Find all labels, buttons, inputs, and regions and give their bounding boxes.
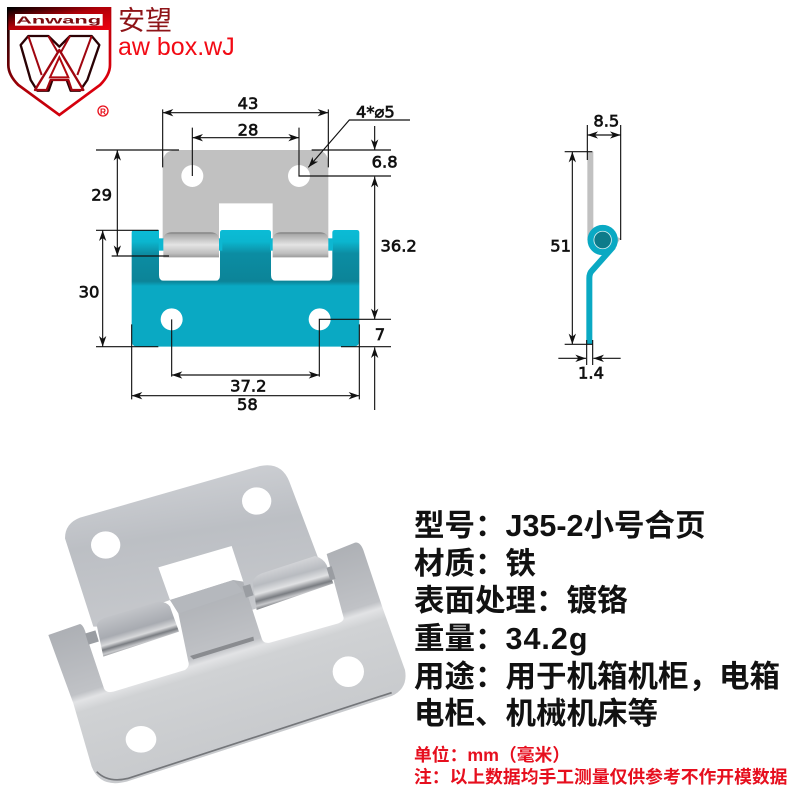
specification text: 重量：34.2g	[414, 622, 588, 656]
specification text: 表面处理：镀铬	[414, 584, 628, 618]
hinge knuckles	[159, 232, 333, 257]
dimension labels: 1.4	[578, 364, 604, 383]
logo: Anwang shield: Anwang	[16, 15, 101, 26]
dimension lines	[558, 125, 621, 365]
teal lower leaf	[132, 230, 359, 347]
specification text: 材质：铁	[414, 547, 536, 581]
dimension labels: 43	[238, 94, 258, 113]
specification text	[414, 509, 780, 731]
lower plate bend highlight	[190, 637, 254, 659]
hinge pins	[85, 566, 335, 645]
mounting holes	[91, 487, 364, 753]
unit and measurement notes: 单位：mm（毫米）	[414, 744, 570, 765]
dimension lines	[96, 109, 410, 410]
right knuckle	[253, 556, 333, 610]
dimension labels: 37.2	[230, 376, 267, 395]
bottom edge highlight	[97, 693, 392, 780]
dimension labels: 51	[550, 237, 571, 256]
side view technical drawing	[550, 112, 621, 383]
front view technical drawing	[79, 94, 417, 414]
brand name: 安望	[118, 6, 172, 36]
teal leaf section	[589, 228, 615, 344]
specification text: 型号：J35-2小号合页	[414, 509, 706, 543]
upper plate	[65, 465, 332, 627]
dimension labels	[550, 112, 619, 383]
brand name: aw box.wJ	[118, 33, 235, 61]
gray leaf section	[587, 152, 621, 247]
dimension labels: 30	[79, 282, 99, 301]
left knuckle	[97, 602, 179, 657]
dimension labels: 6.8	[372, 153, 398, 172]
dimension labels: 7	[375, 325, 385, 344]
centre knuckle	[170, 580, 243, 613]
specification text: 用途：用于机箱机柜，电箱	[414, 660, 780, 694]
product photo: chrome hinge	[48, 465, 406, 783]
unit and measurement notes: 注：以上数据均手工测量仅供参考不作开模数据	[414, 766, 788, 787]
brand name	[118, 6, 235, 61]
dimension labels	[79, 94, 417, 414]
dimension labels: 4*⌀5	[356, 102, 395, 121]
specification text: 电柜、机械机床等	[414, 697, 658, 731]
dimension labels: 36.2	[380, 236, 417, 255]
unit and measurement notes	[414, 744, 788, 787]
dimension labels: 8.5	[593, 112, 619, 131]
logo: Anwang shield	[8, 8, 110, 116]
dimension labels: 28	[238, 120, 258, 139]
dimension labels: 58	[237, 395, 258, 414]
dimension labels: 29	[91, 186, 112, 205]
logo: Anwang shield: R	[100, 106, 106, 116]
lower plate	[48, 543, 406, 783]
gray upper leaf	[163, 150, 328, 247]
